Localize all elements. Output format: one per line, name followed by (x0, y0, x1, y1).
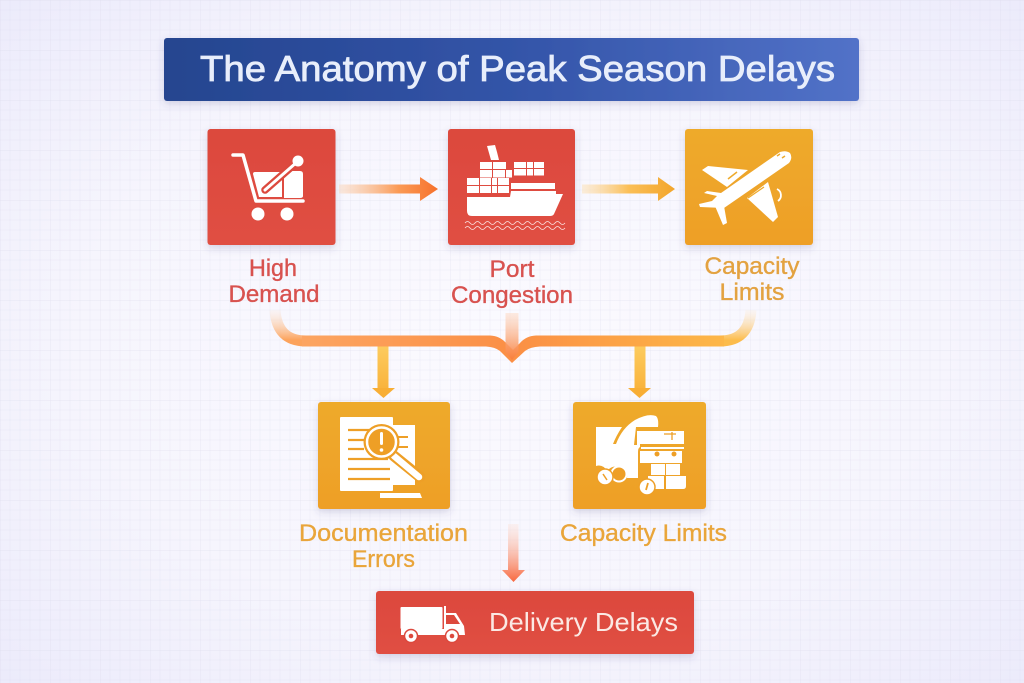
label: capacity limits lower: Capacity Limits (560, 520, 727, 547)
panel: capacity limits top (685, 129, 813, 245)
merging connector (275, 310, 751, 398)
label: port congestion (451, 256, 573, 309)
icon: delivery truck (400, 606, 465, 642)
arrow: demand to port (339, 177, 438, 201)
label: capacity limits top: Capacity (704, 253, 800, 280)
panel: high demand (208, 129, 336, 245)
icon: truck and packages (596, 415, 686, 495)
label: capacity limits top (704, 253, 800, 306)
panel: port congestion (448, 129, 575, 245)
label: port congestion: Port (490, 256, 535, 283)
label: high demand: Demand (228, 281, 320, 308)
arrow: port to capacity (582, 177, 675, 201)
label: delivery delays: Delivery Delays (489, 607, 678, 637)
panel: capacity limits lower (573, 402, 706, 509)
icon: document with magnifier (340, 417, 422, 498)
label: high demand (228, 255, 320, 308)
icon: airplane (699, 151, 791, 225)
title text: The Anatomy of Peak Season Delays (200, 48, 835, 89)
label: documentation errors (299, 520, 468, 573)
label: high demand: High (249, 255, 297, 282)
label: capacity limits top: Limits (720, 279, 784, 306)
icon: container ship (465, 145, 565, 230)
title banner (164, 38, 859, 101)
label: documentation errors: Documentation (299, 520, 468, 547)
icon: shopping cart (233, 155, 304, 220)
panel: delivery delays (376, 591, 694, 654)
arrow: down to delivery delays (502, 524, 525, 582)
label: port congestion: Congestion (451, 282, 573, 309)
panel: documentation errors (318, 402, 450, 509)
label: documentation errors: Errors (352, 546, 415, 573)
